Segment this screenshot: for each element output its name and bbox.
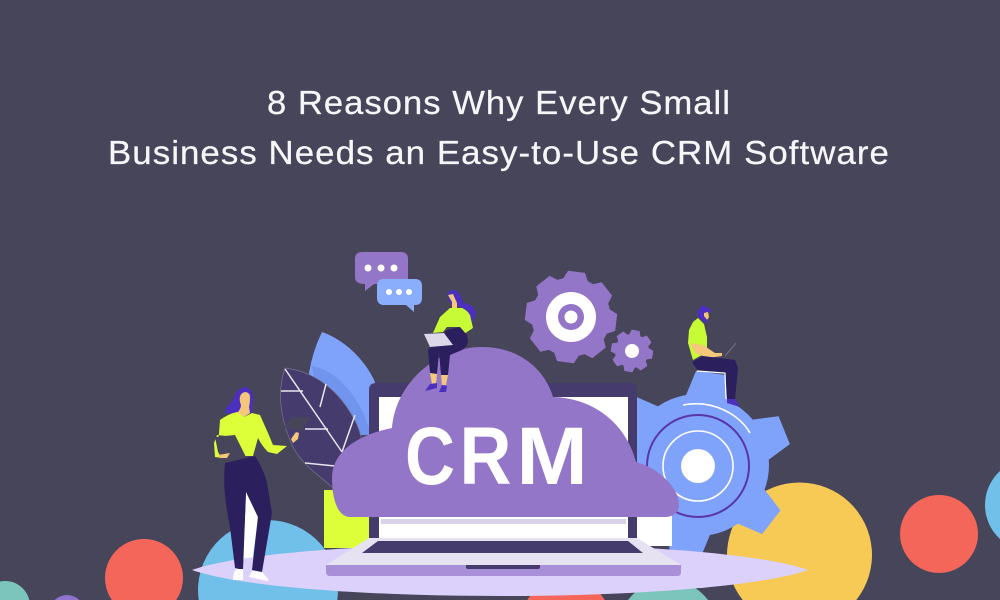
title: Business Needs an Easy-to-Use CRM Software	[108, 134, 890, 171]
standing woman with tablet	[214, 387, 311, 581]
background circles	[0, 471, 1000, 600]
big blue gear	[611, 370, 792, 560]
blue bubble	[377, 279, 422, 312]
laptop base	[326, 538, 681, 576]
white patches	[243, 491, 672, 565]
small purple gear	[610, 329, 654, 373]
cloud with CRM label: R	[460, 411, 512, 502]
seated woman with laptop	[424, 290, 476, 392]
cloud with CRM label: M	[516, 411, 588, 502]
speech bubbles	[355, 252, 422, 312]
leaf	[281, 368, 364, 490]
purple bubble	[355, 252, 408, 291]
ground ellipse	[192, 544, 808, 596]
laptop	[326, 383, 681, 576]
title	[108, 84, 890, 171]
laptop screen	[369, 383, 637, 540]
title: 8 Reasons Why Every Small	[267, 84, 731, 121]
seated man with laptop	[688, 305, 740, 407]
blue wedge behind leaf	[309, 332, 375, 435]
large purple gear	[524, 270, 618, 364]
cloud with CRM label	[332, 347, 679, 517]
cloud with CRM label: C	[405, 411, 455, 502]
lime square	[324, 490, 374, 548]
